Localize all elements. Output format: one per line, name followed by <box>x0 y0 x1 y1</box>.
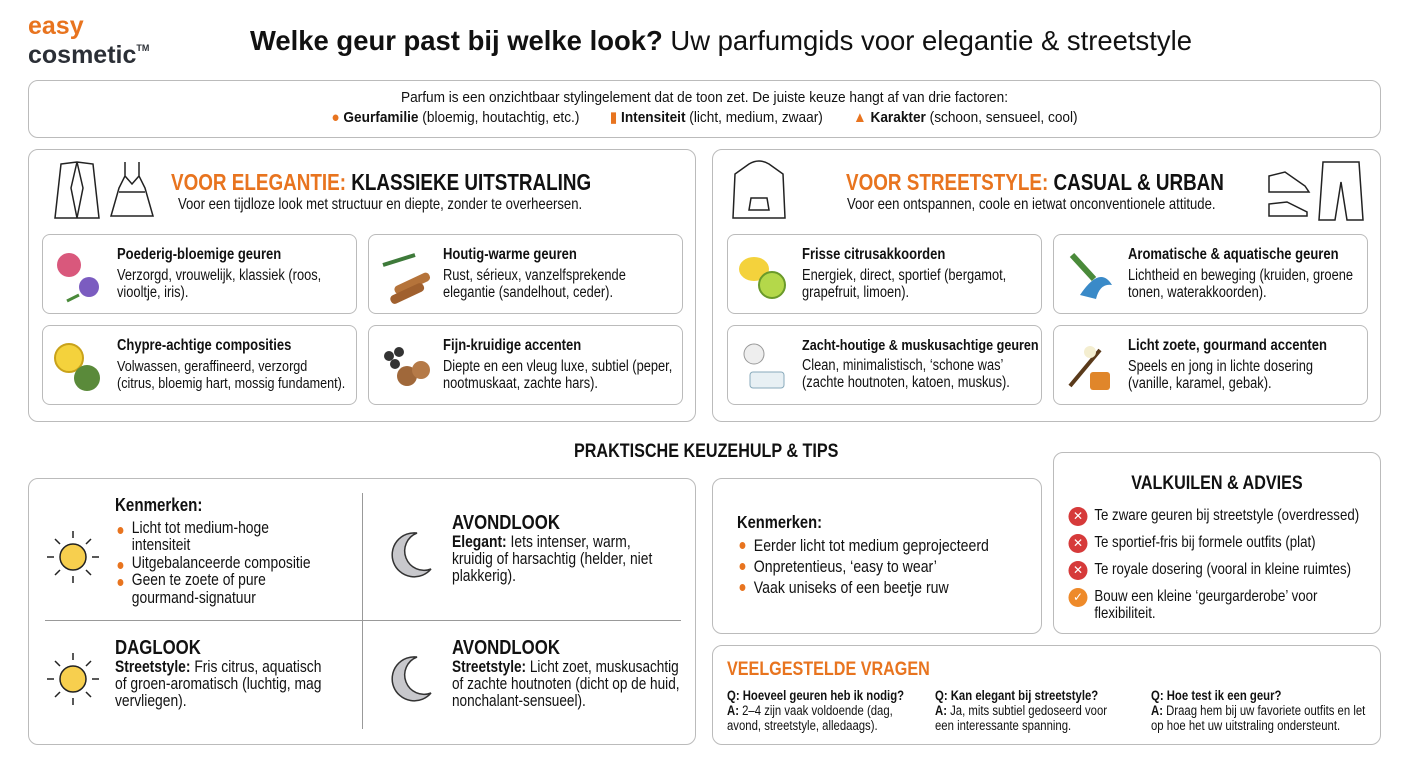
panel: elegance: Voor een tijdloze look met structuur en diepte, zonder te overheersen. <box>178 196 582 213</box>
panel: FAQ: A: 2–4 zijn vaak voldoende (dag, avond, streetstyle, alledaags). <box>727 703 893 733</box>
icon: moon <box>391 532 432 578</box>
text: kenmerken <box>115 495 311 606</box>
panel: street kenmerken: Kenmerken: <box>737 512 822 532</box>
card: chypre: (citrus, bloemig hart, mossig fundament). <box>117 375 345 392</box>
card: citrus: Frisse citrusakkoorden <box>802 246 945 263</box>
card: poederig: Verzorgd, vrouwelijk, klassiek (roos, viooltje, iris). <box>117 267 321 301</box>
card: muskus <box>727 325 1042 405</box>
text: avondlook street: of zachte houtnoten (dicht op de huid, <box>452 675 680 693</box>
heading: VOOR STREETSTYLE: CASUAL & URBAN <box>846 169 1224 195</box>
card: citrus: Energiek, direct, sportief (bergamot, grapefruit, limoen). <box>802 267 1006 301</box>
panel: street kenmerken: Eerder licht tot medium geprojecteerd <box>754 536 989 555</box>
intro box <box>28 80 1381 138</box>
card: gourmand: Licht zoete, gourmand accenten <box>1128 337 1327 354</box>
text: kenmerken: Uitgebalanceerde compositie <box>132 554 311 572</box>
panel: valkuilen: flexibiliteit. <box>1094 605 1156 622</box>
card: aromatisch: Aromatische & aquatische geuren <box>1128 246 1339 263</box>
text: kenmerken: Licht tot medium-hoge intensiteit <box>132 518 269 554</box>
panel: street kenmerken: Onpretentieus, ‘easy to wear’ <box>754 557 937 576</box>
card: muskus: Zacht-houtige & muskusachtige geuren <box>802 337 1039 354</box>
panel: street kenmerken <box>712 478 1042 634</box>
card: houtig: Rust, sérieux, vanzelfsprekende elegantie (sandelhout, ceder). <box>443 267 626 301</box>
panel: FAQ: Q: Hoe test ik een geur? <box>1151 688 1281 703</box>
icon: jacket and dress <box>54 161 154 219</box>
panel: FAQ: VEELGESTELDE VRAGEN <box>727 659 930 680</box>
logo: cosmeticTM <box>28 41 149 69</box>
logo <box>28 12 149 69</box>
panel: streetstyle <box>712 149 1381 422</box>
panel: valkuilen: Te royale dosering (vooral in kleine ruimtes) <box>1094 561 1351 578</box>
text: avondlook elegant: Elegant: Iets intenser, warm, kruidig of harsachtig (helder, niet plakkerig). <box>452 533 652 585</box>
panel: valkuilen: ✕ <box>1073 563 1083 577</box>
card: muskus: Clean, minimalistisch, ‘schone was’ (zachte houtnoten, katoen, muskus). <box>802 357 1010 391</box>
card: chypre <box>42 325 357 405</box>
panel: FAQ: Q: Kan elegant bij streetstyle? <box>935 688 1098 703</box>
card: citrus <box>727 234 1042 314</box>
panel: day/evening <box>28 478 696 745</box>
panel: FAQ: Q: Hoeveel geuren heb ik nodig? <box>727 688 904 703</box>
card: houtig: Houtig-warme geuren <box>443 246 577 263</box>
text: avondlook elegant: AVONDLOOK <box>452 512 560 534</box>
card: kruidig: Fijn-kruidige accenten <box>443 337 581 354</box>
panel: valkuilen: VALKUILEN & ADVIES <box>1131 473 1303 494</box>
text: avondlook street: Streetstyle: Licht zoet, muskusachtig <box>452 658 679 676</box>
icon: sun <box>47 531 99 583</box>
intro box: ● Geurfamilie (bloemig, houtachtig, etc.) ▮ Intensiteit (licht, medium, zwaar) ▲ Karakter (schoon, sensueel, cool) <box>331 109 1078 126</box>
text: avondlook street <box>452 637 680 710</box>
panel: valkuilen: Te zware geuren bij streetstyle (overdressed) <box>1094 507 1359 524</box>
panel: FAQ: A: Draag hem bij uw favoriete outfits en let op hoe het uw uitstraling ondersteunt. <box>1151 703 1365 733</box>
text: kenmerken: Geen te zoete of pure gourmand-signatuur <box>132 571 266 606</box>
panel: street kenmerken: Vaak uniseks of een beetje ruw <box>754 578 949 597</box>
panel: valkuilen: ✕ <box>1073 536 1083 550</box>
text: avondlook street: nonchalant-sensueel). <box>452 692 586 710</box>
intro box: Parfum is een onzichtbaar stylingelement dat de toon zet. De juiste keuze hangt af van drie factoren: <box>401 89 1008 106</box>
icon: moon <box>391 656 432 702</box>
text: daglook: DAGLOOK <box>115 637 201 659</box>
card: kruidig <box>368 325 683 405</box>
logo: easy <box>28 12 84 40</box>
heading: VOOR ELEGANTIE: KLASSIEKE UITSTRALING <box>171 169 591 195</box>
card: gourmand <box>1053 325 1368 405</box>
card: chypre: Chypre-achtige composities <box>117 337 291 354</box>
panel: elegance <box>28 149 696 422</box>
panel: valkuilen: Bouw een kleine ‘geurgarderobe’ voor <box>1094 588 1317 605</box>
text: avondlook street: AVONDLOOK <box>452 637 560 659</box>
card: houtig <box>368 234 683 314</box>
icon: sneakers and pants <box>1268 161 1364 221</box>
panel: FAQ: A: Ja, mits subtiel gedoseerd voor een interessante spanning. <box>935 703 1107 733</box>
card: aromatisch <box>1053 234 1368 314</box>
icon: hoodie <box>732 160 786 219</box>
card: gourmand: Speels en jong in lichte dosering (vanille, karamel, gebak). <box>1128 358 1313 392</box>
panel: valkuilen <box>1053 452 1381 634</box>
panel: FAQ <box>712 645 1381 745</box>
icon: sun <box>47 653 99 705</box>
panel: valkuilen: ✓ <box>1073 590 1083 604</box>
card: poederig: Poederig-bloemige geuren <box>117 246 281 263</box>
text: daglook: Streetstyle: Fris citrus, aquatisch of groen-aromatisch (luchtig, mag vervliegen). <box>115 658 321 710</box>
title: Welke geur past bij welke look? Uw parfumgids voor elegantie & streetstyle <box>250 25 1192 56</box>
card: chypre: Volwassen, geraffineerd, verzorgd <box>117 358 307 375</box>
section heading: PRAKTISCHE KEUZEHULP & TIPS <box>574 441 838 462</box>
card: poederig <box>42 234 357 314</box>
panel: streetstyle: Voor een ontspannen, coole en ietwat onconventionele attitude. <box>847 196 1216 213</box>
card: aromatisch: Lichtheid en beweging (kruiden, groene tonen, waterakkoorden). <box>1128 267 1353 301</box>
panel: valkuilen: ✕ <box>1073 509 1083 523</box>
card: kruidig: Diepte en een vleug luxe, subtiel (peper, nootmuskaat, zachte hars). <box>443 358 672 392</box>
text: kenmerken: Kenmerken: <box>115 495 202 515</box>
panel: valkuilen: Te sportief-fris bij formele outfits (plat) <box>1094 534 1316 551</box>
